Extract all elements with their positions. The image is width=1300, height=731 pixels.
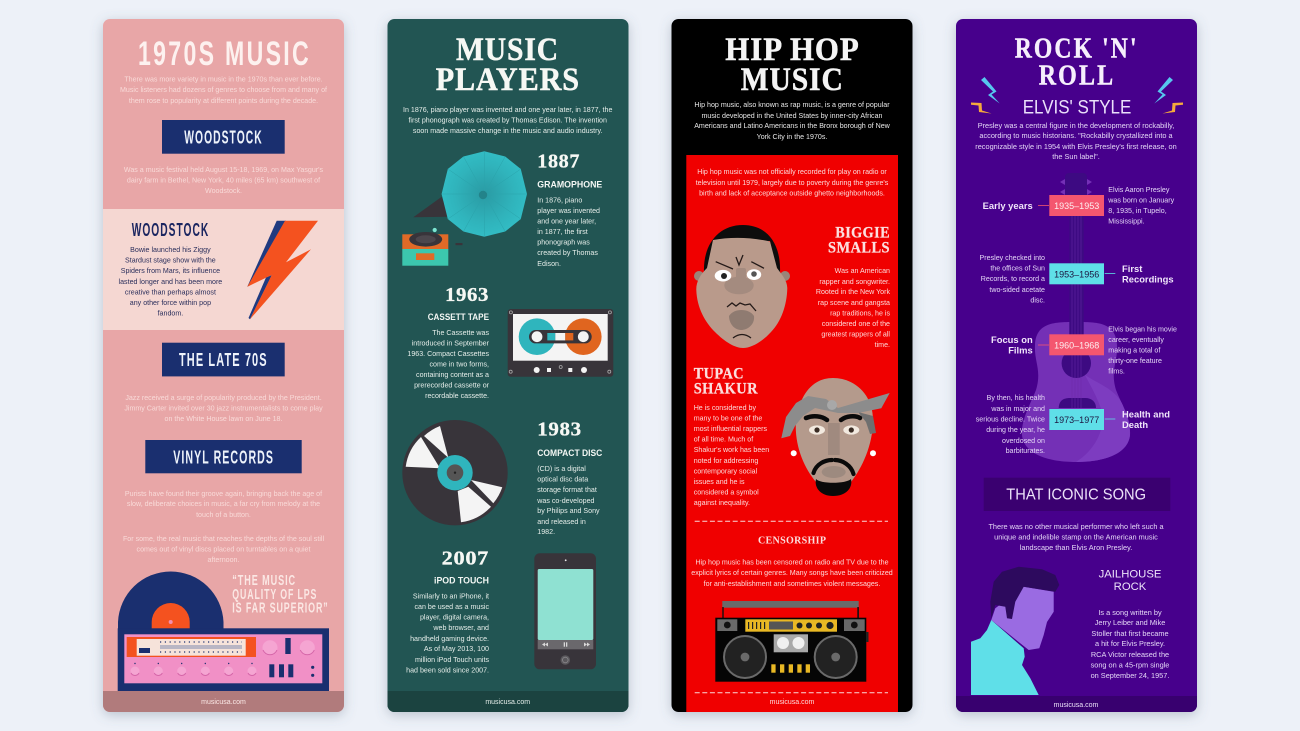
tupac text: against inequality. [694,499,750,507]
compact disc text: was co-developed [536,497,595,505]
gramophone text: 1887 [537,151,580,173]
portrait: tupac shakur [781,378,890,496]
ipod text: web browser, and [432,624,489,632]
jailhouse rock text: Stoller that first became [1091,629,1169,638]
title: hip hop music: HIP HOP [725,32,860,68]
jailhouse rock text: on September 24, 1957. [1091,671,1169,680]
vinyl text: Purists have found their groove again, bringing back the age of [125,490,322,498]
intro text: Americans and Latino Americans in the Bronx borough of New [694,122,891,130]
timeline: 1953-1956: the offices of Sun [990,264,1045,272]
late 70s text [124,394,323,423]
cassette text: introduced in September [412,340,490,348]
late 70s text: on the White House lawn on June 18. [165,415,282,423]
biggie text: greatest rappers of all [821,330,890,338]
red panel intro [696,168,889,198]
ipod text: 2007 [442,547,489,569]
timeline: 1973-1977: was in major and [990,405,1045,413]
heading box: that iconic song [984,478,1170,511]
intro text: York City in the 1970s. [757,133,827,141]
biggie text: rap scene and gangsta [818,299,890,307]
biggie text: Rooted in the New York [816,288,890,296]
biggie text: SMALLS [828,240,890,256]
timeline: 1953-1956: Recordings [1122,274,1174,284]
heading box: the late 70s [162,343,285,376]
intro text: Music listeners had dozens of genres to choose from and many of [120,86,327,94]
vinyl text [123,490,324,564]
ipod text: Similarly to an iPhone, it [413,592,489,600]
title: music players: PLAYERS [436,62,580,98]
compact disc text [536,419,602,536]
intro text [403,106,612,135]
compact disc text: (CD) is a digital [537,465,586,473]
vinyl text: afternoon. [208,556,239,564]
band text: Spiders from Mars, its influence [121,267,220,275]
timeline: 1935-1953: was born on January [1107,196,1175,204]
ipod text: As of May 2013, 100 [424,645,489,653]
song text: unique and indelible stamp on the American music [994,532,1158,542]
tupac text: many to be one of the [694,414,762,422]
tupac text: noted for addressing [694,457,758,465]
quote: IS FAR SUPERIOR” [232,600,329,616]
ipod text: can be used as a music [414,603,489,611]
intro text: There was more variety in music in the 1970s than ever before. [124,76,323,84]
timeline: 1973-1977: Health and [1122,408,1170,420]
title: music players [436,32,580,98]
heading box: vinyl records: VINYL RECORDS [173,446,274,467]
gramophone text: GRAMOPHONE [537,179,602,190]
quote [232,573,329,616]
icon: cassette tape [508,309,613,377]
intro text: In 1876, piano player was invented and one year later, in 1877, the [403,106,612,114]
compact disc text: and released in [537,518,586,526]
gramophone text: Edison. [537,260,561,268]
intro text: soon made massive change in the music and audio industry. [413,127,602,135]
band text: Bowie launched his Ziggy [130,246,211,254]
tupac text: Shakur's work has been [694,446,769,454]
timeline: 1935-1953: 8, 1935, in Tupelo, [1108,207,1167,215]
timeline: 1960-1968: films. [1108,368,1125,376]
footer [103,691,344,712]
intro text: Presley was a central figure in the development of rockabilly, [978,121,1174,130]
title: rock n roll: ROCK 'N' [1015,32,1139,64]
footer: musicusa.com [485,699,530,706]
title: rock n roll [1015,32,1139,91]
timeline: 1973-1977: 1973–1977 [1054,415,1099,425]
footer: musicusa.com [770,699,815,706]
biggie text: rapper and songwriter. [819,278,890,286]
band heading: WOODSTOCK [132,219,209,240]
woodstock text: dairy farm in Bethel, New York, 40 miles (65 km) southwest of [127,176,320,184]
woodstock text: Woodstock. [205,187,242,195]
panel: hip hop music [672,19,912,712]
red panel [686,155,898,712]
heading box: that iconic song: THAT ICONIC SONG [1006,486,1146,504]
ipod text [406,547,489,674]
timeline: 1935-1953 [983,186,1175,226]
icon: gramophone [402,151,527,266]
censorship text: Hip hop music has been censored on radio and TV due to the [695,558,889,566]
timeline: 1935-1953: Elvis Aaron Presley [1108,186,1170,194]
intro text [694,101,891,141]
footer: musicusa.com [1054,702,1099,709]
censorship text: explicit lyrics of certain genres. Many songs have been criticized [691,569,893,577]
intro text: according to music historians. "Rockabilly crystallized into a [979,131,1174,140]
tupac text: He is considered by [694,404,756,412]
intro text: first phonograph was created by Thomas Edison. The invention [408,116,607,124]
timeline: 1953-1956: 1953–1956 [1054,269,1099,279]
icon: elvis silhouette [971,567,1059,695]
intro text: recognizable style in 1954 with Elvis Presley's first release, on [975,142,1177,151]
band text: creative than perhaps almost [125,288,216,296]
gramophone text: player was invented [537,207,600,215]
timeline: 1935-1953: Early years [983,200,1033,211]
timeline: 1960-1968: 1960–1968 [1054,340,1099,350]
timeline: 1960-1968: thirty-one feature [1108,357,1162,365]
timeline: 1953-1956: Presley checked into [980,254,1045,262]
title: music players: MUSIC [456,32,559,68]
heading box: vinyl records [145,440,302,473]
song text [988,522,1164,552]
title: hip hop music: MUSIC [741,62,844,98]
biggie text: rap traditions, he is [830,310,890,318]
censorship text: for anti-establishment and sometimes violent messages. [704,580,880,588]
cassette text: recordable cassette. [425,392,489,400]
icon: boombox [715,601,868,682]
jailhouse rock text [1091,569,1169,680]
jailhouse rock text: song on a 45-rpm single [1091,660,1169,670]
cassette text: CASSETT TAPE [428,312,489,323]
band text: fandom. [158,310,183,318]
timeline: 1960-1968: Films [1008,344,1033,356]
tupac text: most influential rappers [694,425,767,433]
timeline: 1960-1968: career, eventually [1108,336,1164,344]
compact disc text: 1982. [537,528,555,536]
footer: musicusa.com [201,699,246,706]
red panel intro: television until 1979, largely due to poverty during the genre's [696,179,889,187]
biggie text: BIGGIE [835,224,890,242]
timeline: 1953-1956: First [1122,263,1142,274]
timeline: 1953-1956 [980,254,1174,304]
intro text [120,76,327,105]
compact disc text: 1983 [537,419,582,441]
cassette text: containing content as a [416,371,489,379]
woodstock text [124,166,324,195]
portrait: biggie smalls [694,225,790,348]
cassette text: prerecorded cassette or [414,382,490,390]
decorative bolts [971,77,1183,114]
intro text: Hip hop music, also known as rap music, is a genre of popular [694,101,890,109]
timeline: 1935-1953: 1935–1953 [1054,201,1099,211]
compact disc text: COMPACT DISC [537,448,602,459]
song text: There was no other musical performer who left such a [988,522,1164,531]
jailhouse rock text: Is a song written by [1098,608,1162,617]
tupac text [694,366,769,507]
vinyl text: touch of a button. [196,511,251,519]
timeline: 1973-1977: By then, his health [987,394,1045,402]
footer [956,696,1197,712]
timeline: 1973-1977: overdosed on [1002,437,1045,445]
panel: music players [388,19,628,712]
gramophone text: phonograph was [537,238,590,246]
timeline: 1960-1968: Elvis began his movie [1108,326,1177,334]
icon: vinyl record [118,571,224,629]
timeline: 1935-1953: Mississippi. [1108,218,1145,226]
timeline: 1953-1956: two-sided acetate [989,286,1045,294]
tupac text: considered a symbol [694,488,759,496]
timeline: 1953-1956: Records, to record a [981,275,1045,283]
timeline: 1973-1977: during the year, he [986,426,1045,434]
timeline: 1973-1977 [976,394,1170,455]
tupac text: TUPAC [694,366,744,382]
timeline: 1960-1968 [991,326,1177,376]
subtitle: ELVIS' STYLE [1023,96,1131,118]
jailhouse rock text: JAILHOUSE [1099,569,1162,581]
tupac text: of all time. Much of [694,436,753,444]
gramophone text: In 1876, piano [537,196,582,204]
footer [388,691,628,712]
vinyl text: slow, deliberate choices in music, a far cry from melody at the [127,500,320,508]
vinyl text: comes out of vinyl discs placed on turntables on a quiet [137,546,310,554]
ipod text: million iPod Touch units [415,656,489,664]
late 70s text: Jimmy Carter invited over 30 jazz instrumentalists to come play [124,404,323,412]
icon: stereo receiver [118,628,329,691]
band text: any other force within pop [130,299,211,307]
woodstock text: Was a music festival held August 15-18, 1969, on Max Yasgur's [124,166,324,174]
biggie text: Was an American [835,267,890,275]
icon: compact disc [402,420,508,525]
heading box: the late 70s: THE LATE 70S [179,349,268,370]
icon: lightning bolt [247,221,318,319]
biggie text [816,224,890,349]
jailhouse rock text: Jerry Leiber and Mike [1095,618,1165,627]
jailhouse rock text: RCA Victor released the [1091,650,1169,659]
intro text: the Sun label". [1052,152,1100,161]
icon: ipod touch [534,553,596,669]
ipod text: handheld gaming device. [410,635,489,643]
band text [119,246,222,318]
compact disc text: by Philips and Sony [537,507,600,515]
gramophone text [537,151,602,268]
ipod text: player, digital camera, [420,614,489,622]
tupac text: SHAKUR [694,380,758,398]
heading box: woodstock: WOODSTOCK [184,126,263,147]
late 70s text: Jazz received a surge of popularity produced by the President. [125,394,322,402]
band text: lasted longer and has been more [119,278,222,286]
song text: landscape than Elvis Aron Presley. [1020,543,1132,552]
title: rock n roll: ROLL [1039,59,1115,91]
panel: rock n roll [956,19,1197,712]
quote: “THE MUSIC [232,573,296,589]
cassette text: 1963. Compact Cassettes [407,350,489,358]
title: hip hop music [725,32,860,98]
gramophone text: and one year later, [537,218,596,226]
gramophone text: created by Thomas [537,249,598,257]
timeline: 1960-1968: making a total of [1108,346,1160,354]
biggie text: considered one of the [822,320,890,328]
cassette text [407,284,490,400]
cassette text: The Cassette was [432,329,489,337]
intro text: music developed in the United States by inner-city African [702,112,883,120]
censorship text [691,558,893,588]
icon: guitar [1022,173,1130,462]
jailhouse rock text: ROCK [1114,581,1147,593]
band text: Stardust stage show with the [125,256,216,264]
compact disc text: storage format that [537,486,597,494]
quote: QUALITY OF LPS [232,587,317,603]
timeline: 1960-1968: Focus on [991,334,1033,345]
timeline: 1973-1977: serious decline. Twice [976,416,1045,424]
red panel intro: birth and lack of acceptance outside ghetto neighborhoods. [699,190,885,198]
compact disc text: optical disc data [537,476,588,484]
vinyl text: For some, the real music that reaches the depths of the soul still [123,535,324,543]
cassette text: 1963 [445,284,489,306]
panel: 1970s music [103,19,344,712]
biggie text: time. [875,341,890,349]
title: 1970s music: 1970S MUSIC [138,35,311,73]
timeline: 1973-1977: barbiturates. [1006,447,1045,455]
jailhouse rock text: a hit for Elvis Presley. [1095,639,1165,648]
tupac text: issues and he is [694,478,745,486]
red panel intro: Hip hop music was not officially recorded for play on radio or [697,168,887,176]
gramophone text: in 1877, the first [537,228,588,236]
timeline: 1973-1977: Death [1122,419,1148,430]
ipod text: iPOD TOUCH [434,575,489,586]
tupac text: contemporary social [694,468,758,476]
timeline: 1953-1956: disc. [1030,296,1045,304]
intro text: them rose to popularity at different points during the decade. [129,97,318,105]
censorship heading: CENSORSHIP [758,535,827,546]
cassette text: come in two forms, [429,360,489,368]
heading box: woodstock [162,120,285,154]
band: ziggy stardust [103,209,344,330]
ipod text: had been sold since 2007. [406,666,489,674]
intro text [975,121,1177,161]
